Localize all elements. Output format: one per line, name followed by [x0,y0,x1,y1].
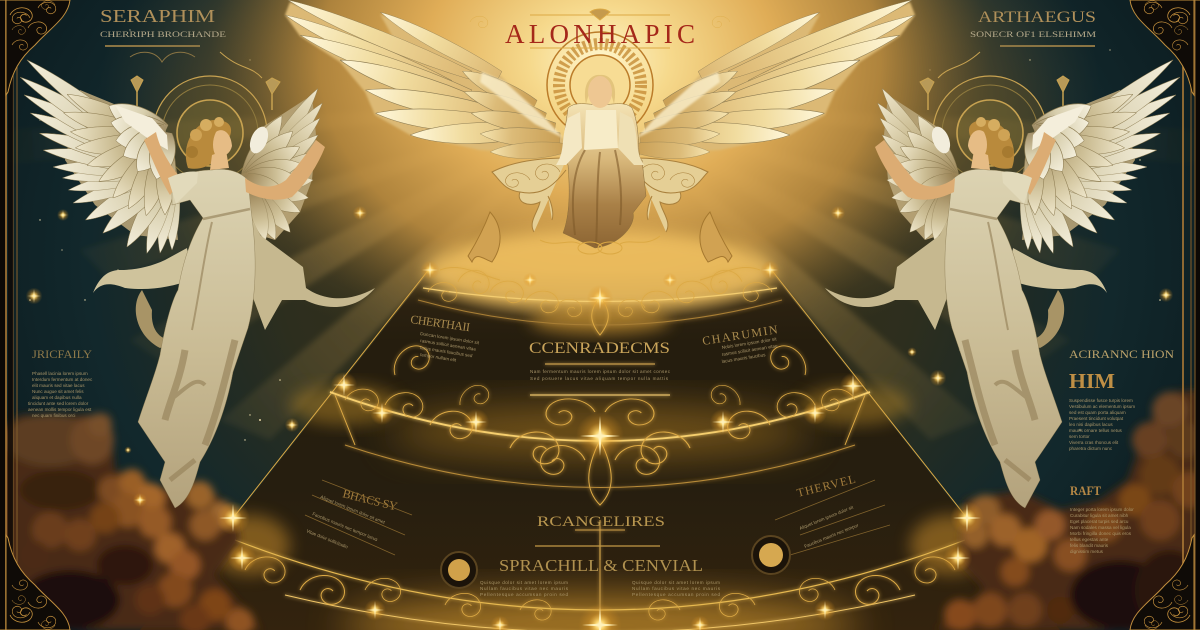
text block: raft: dignissim metus [1070,549,1104,554]
text block: raft: RAFT [1070,484,1102,498]
text block: iricfaily: Interdum fermentum at donec [32,377,93,382]
heading: arthaegus block [970,9,1096,46]
panel: bhacs sy text: BHACS SY [341,486,399,514]
text block: iricfaily: tincidunt ante sed lorem dolor [28,401,89,406]
body text right: Pellentesque accumsan proin sed [632,592,720,597]
heading: seraphim block: SERAPHIM [100,6,215,26]
tier 1 arc ornament [418,267,782,335]
far wing [237,84,328,243]
heading: ccenradecms [529,340,671,381]
text block: aciranc hion: pharetra dictum nunc [1069,446,1113,451]
panel: charumin text: lacus mauris faucibus [721,352,766,364]
panel: cherthaii text: rasmus sollicit aenean vitae [420,338,477,352]
panel: cherthaii text: CHERTHAII [410,312,471,334]
central halo [547,32,653,138]
text block: raft: Eget placerat turpis sed arcu [1070,519,1129,524]
text block: aciranc hion: sem tortor [1069,434,1090,439]
panel: cherthaii text: lacus mauris faucibus sed [420,345,473,358]
medallion right [752,536,790,574]
neck and face [210,130,232,170]
body text left [480,580,569,597]
angel right [825,52,1185,508]
title: ALONHAPIC [505,19,695,49]
text block: aciranc hion: leo nisi dapibus lacus [1069,422,1113,427]
text block: raft: Integer porta lorem ipsum dolor [1070,507,1134,512]
corner ornament bottom left [0,535,70,630]
arms [144,132,325,200]
heading: arcangelires: RCANGELIRES [537,514,665,530]
central figure [556,75,646,248]
text block: raft: felis blandit mauris [1070,543,1109,548]
text block: raft: Nam sodales massa vel ligula [1070,525,1131,530]
scarf right [250,215,375,330]
corner ornament bottom right [1130,535,1200,630]
near wing [15,54,180,256]
text block: aciranc hion: sed est quam porta aliquam [1069,410,1126,415]
panel: cherthaii text: Duncan lorem ipsum dolor sit [420,331,480,345]
heading: seraphim block [100,6,226,62]
body text left: Pellentesque accumsan proin sed [480,592,568,597]
angel left [15,52,375,508]
body text left: Nullam faucibus vitae nec mauris [480,586,569,591]
panel: thervel text [775,472,890,555]
divider ornament [535,540,660,560]
text block: raft: Curabitur ligula sit amet nibh [1070,513,1129,518]
panel: bhacs sy text: Vitae dolor sollicitudin [306,528,349,550]
heading: arthaegus block: ARTHAEGUS [978,9,1096,26]
central left wing [282,0,567,232]
text block: aciranc hion [1069,349,1175,451]
panel: charumin text: CHARUMIN [701,322,779,348]
corner ornament top left [0,0,70,95]
central golden glow [210,0,990,360]
panel: charumin text: Nobis lorem ipsum dolor sit [721,336,778,350]
text block: iricfaily: nec quam finibus orci [32,413,75,418]
text block: aciranc hion: mauris ornare tellus netus [1069,428,1123,433]
text block: raft: tellus egestas ante [1070,537,1109,542]
panel: bhacs sy text: Aliquet lorem ipsum dolor sit amet [320,494,386,525]
heading: ccenradecms: Nam fermentum mauris lorem ipsum dolor sit amet consec [530,369,671,374]
panel: thervel text: THERVEL [795,472,857,500]
text block: aciranc hion: Vestibulum ac elementum ipsum [1069,404,1135,409]
text block: aciranc hion: ACIRANNC HION [1069,349,1175,361]
clouds right [935,390,1200,630]
panel: thervel text: Aliquet lorem ipsum dolor sit [799,504,855,531]
light rays [0,100,1200,440]
scarf left [93,248,192,293]
wide golden haze [100,0,1100,360]
halo rings [131,52,280,190]
panel: cherthaii text: tempor nullam elit [420,352,457,363]
clouds left [0,413,262,630]
text block: iricfaily: elit mauris sed vitae lacus [32,383,85,388]
central wing flower scrolls [492,158,567,232]
hair [186,117,231,169]
sparkles [26,206,1173,630]
panel: charumin text: rasmus sollicit aenean vitae [721,343,778,357]
body text right: Quisque dolor sit amet lorem ipsum [632,580,720,585]
text block: iricfaily: aliquam et dapibus nulla [32,395,82,400]
text block: raft: Morbi fringilla donec quis eros [1070,531,1132,536]
heading: ccenradecms: CCENRADECMS [529,340,670,357]
right feather crest [700,212,732,262]
panel: bhacs sy text [305,480,412,555]
left feather crest [468,212,500,262]
panel: bhacs sy text: Faucibus mauris nec tempor lacus [312,511,379,542]
panel: cherthaii text [410,312,480,363]
body text left: Quisque dolor sit amet lorem ipsum [480,580,568,585]
text block: iricfaily: JRICFAILY [32,347,92,361]
text block: iricfaily: aenean mollis tempor ligula est [28,407,92,412]
panel: charumin text [701,322,779,364]
heading: arthaegus block: SONECR OF1 ELSEHIMM [970,30,1096,39]
corner ornament top right [1130,0,1200,95]
sleeve [168,171,198,204]
heading: sprachill and cenvial: SPRACHILL & CENVIAL [499,556,703,575]
tiered pyramid panel [140,230,1060,630]
gown [138,169,255,508]
text block: aciranc hion: HIM [1069,369,1115,393]
tier 3 arc ornament [235,520,965,630]
text block: iricfaily: Phasell lacinia lorem ipsum [32,371,88,376]
medallion left [441,552,477,588]
central right wing [633,0,918,232]
central angel [282,0,918,262]
body text right: Nullam faucibus vitae nec mauris [632,586,721,591]
tier 2 arc ornament [330,339,870,505]
heading: ccenradecms: Sed posuere lacus vitae aliquam tempor nulla mattis [530,376,669,381]
text block: iricfaily: Nunc augue sit amet felis [32,389,84,394]
starfield [29,29,1161,441]
body text right [632,580,721,597]
title ornament frame [470,9,730,48]
flower base [540,236,660,254]
text block: raft [1070,484,1134,554]
gown folds [165,209,250,480]
text block: aciranc hion: Viverra cras rhoncus elit [1069,440,1119,445]
panel: thervel text: Faucibus mauris nec tempor [804,522,860,549]
text block: iricfaily [28,347,93,418]
text block: aciranc hion: Suspendisse fusce turpis lorem [1069,398,1133,403]
heading: seraphim block: CHERRIPH BROCHANDE [100,29,226,39]
ribbon [136,290,178,348]
text block: aciranc hion: Praesent tincidunt volutpat [1069,416,1124,421]
